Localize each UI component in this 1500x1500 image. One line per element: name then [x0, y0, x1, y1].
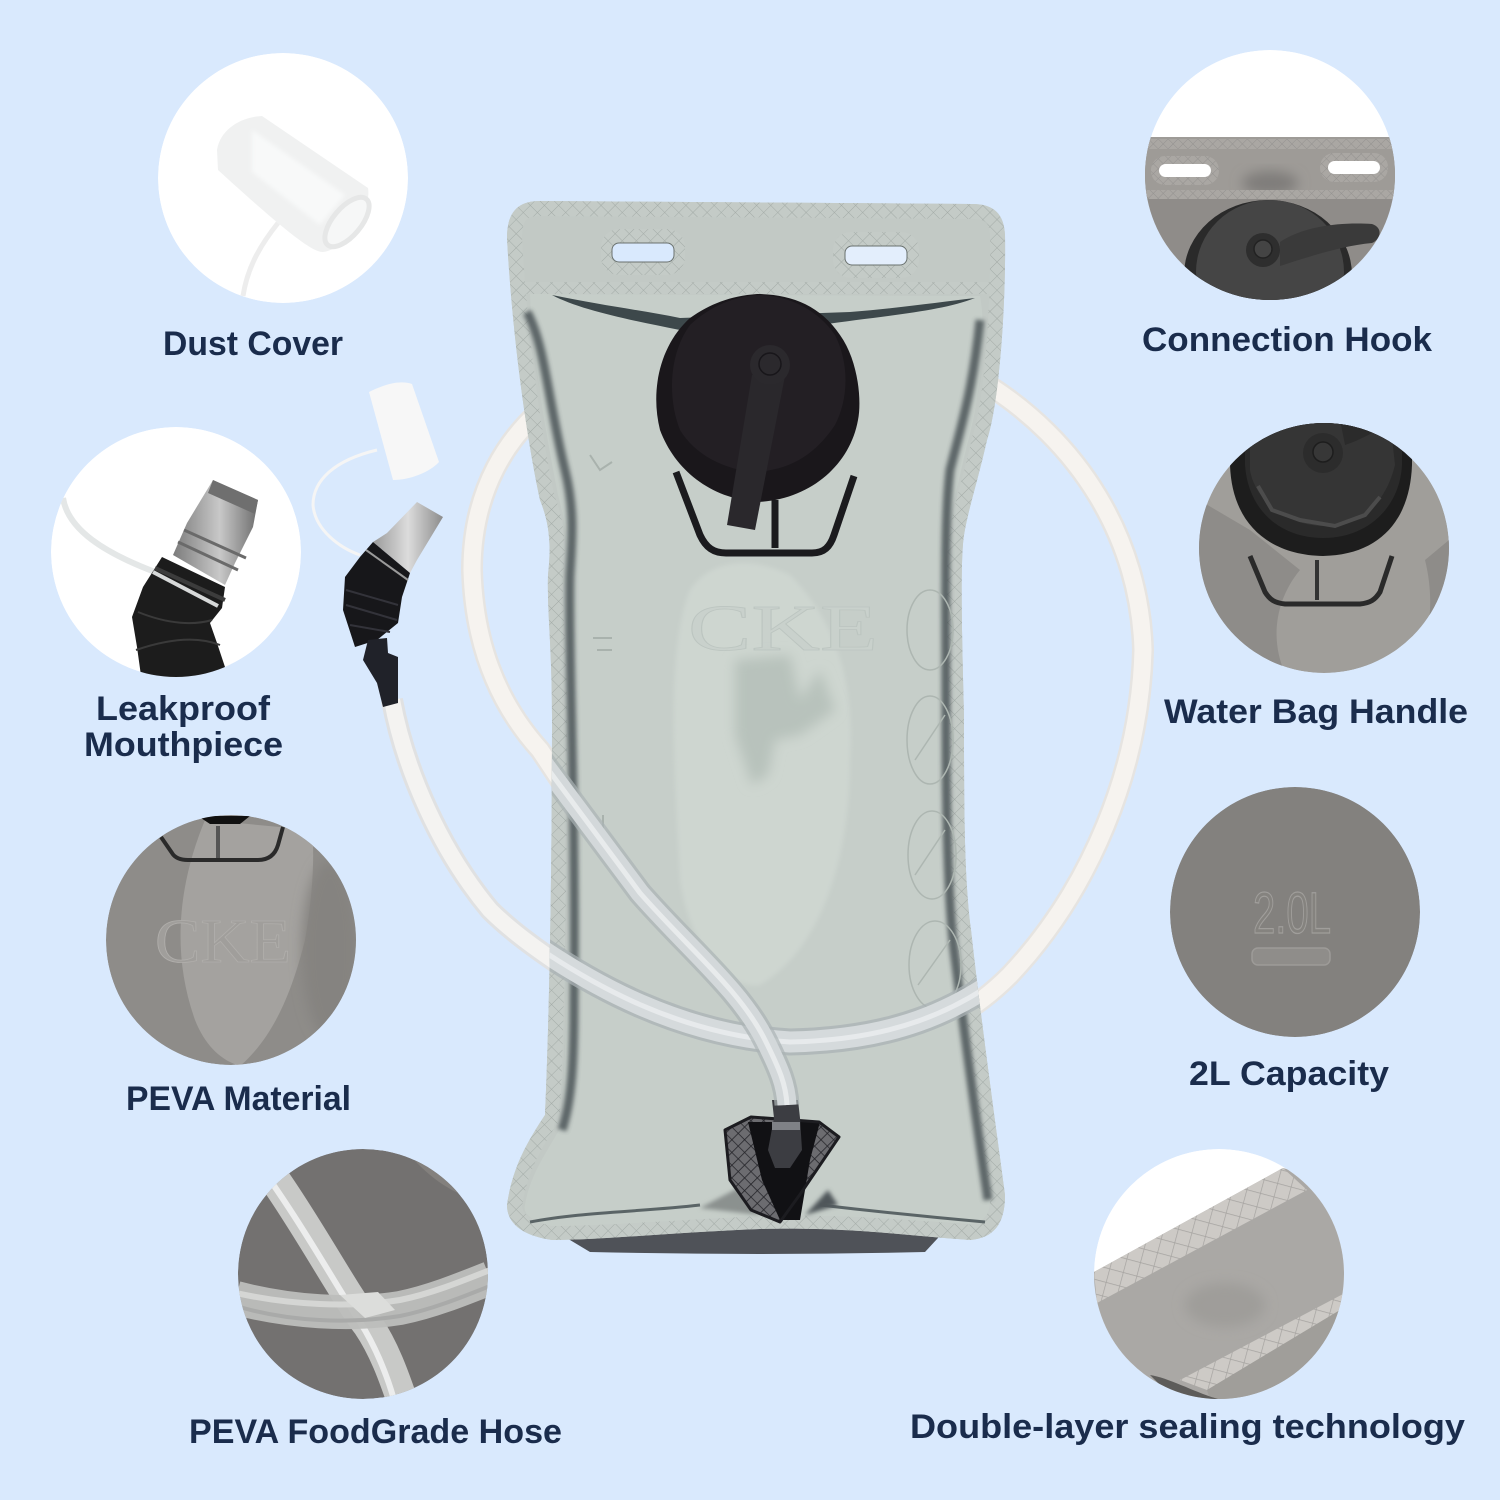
capacity marks	[590, 455, 612, 835]
icon: lighter centre oval	[181, 820, 313, 1066]
icon: clear valve tip	[173, 480, 258, 585]
left dark edge	[527, 312, 574, 1130]
upper header seam	[520, 282, 990, 294]
heading: Leakproof Mouthpiece: Leakproof	[96, 690, 271, 728]
bag shadow	[545, 1225, 950, 1254]
heading: PEVA Material: PEVA Material	[126, 1080, 351, 1118]
bottom dark crease	[530, 1205, 985, 1222]
icon: thin tether	[63, 498, 155, 572]
hanging slot right	[833, 232, 919, 278]
heading: PEVA FoodGrade Hose: PEVA FoodGrade Hose	[189, 1413, 562, 1451]
panel: connection hook detail	[1145, 50, 1395, 300]
icon: diagonal tube	[270, 1180, 402, 1400]
right dark edge	[946, 320, 988, 1200]
lanyard	[313, 450, 377, 555]
central lighter oval	[674, 563, 851, 985]
embossed fill line	[1252, 948, 1330, 965]
separate mouthpiece assembly	[313, 382, 443, 707]
hose loop behind the bag	[392, 380, 1143, 1018]
bag seam border	[507, 201, 1005, 1240]
main water bladder	[490, 190, 1030, 1250]
cap body	[656, 294, 859, 502]
top dark crease	[552, 295, 975, 330]
panel: PEVA material detail	[106, 815, 358, 1066]
warning icons right column	[907, 590, 961, 1009]
icon: handle frame	[161, 827, 283, 860]
embossed CKE logo: CKE	[688, 592, 878, 665]
cap assembly	[656, 294, 859, 553]
hose: run to outlet	[530, 745, 787, 1105]
heading: Double-layer sealing technology: Double-layer sealing technology	[910, 1408, 1465, 1446]
icon: handle frame	[1250, 556, 1392, 604]
panel: food grade hose detail	[236, 1149, 490, 1400]
icon: black elbow body	[132, 557, 225, 677]
heading: Water Bag Handle: Water Bag Handle	[1164, 693, 1468, 731]
icon: lanyard	[243, 223, 278, 296]
icon: right slot	[1320, 153, 1388, 182]
black elbow body	[343, 542, 410, 647]
panel: leakproof mouthpiece detail	[51, 427, 301, 690]
icon: cap with strap	[1184, 200, 1380, 300]
white dust cap	[369, 382, 439, 480]
barbed connector	[363, 638, 398, 707]
heading: Dust Cover: Dust Cover	[163, 325, 343, 363]
icon: clear dust cap	[217, 116, 377, 254]
icon: cap	[1230, 410, 1412, 556]
heading: Leakproof Mouthpiece	[84, 690, 283, 764]
hanging slot left	[601, 229, 685, 275]
outlet fitting	[700, 1100, 839, 1222]
icon: left slot	[1151, 156, 1219, 185]
hose: lower bend	[550, 940, 980, 1056]
icon: upper seam band	[1094, 1168, 1307, 1303]
front hose across the bag	[550, 754, 980, 1106]
embossed CKE logo: CKE	[155, 908, 291, 976]
bag interior	[525, 294, 990, 1226]
panel: double-layer sealing detail	[1094, 1149, 1344, 1399]
icon: lower seam band	[1180, 1293, 1345, 1390]
panel: 2L capacity detail	[1170, 787, 1420, 1037]
hose barb	[768, 1100, 802, 1168]
cap strap	[727, 375, 785, 530]
clear valve tip	[373, 502, 443, 573]
icon: horizontal tube	[236, 1270, 490, 1321]
heading: Leakproof Mouthpiece: Mouthpiece	[84, 726, 283, 764]
cap knob	[750, 345, 790, 385]
handle frame	[676, 472, 854, 553]
embossed 2.0L mark: 2.0L	[1253, 881, 1331, 946]
panel: dust cover detail	[158, 53, 408, 303]
reflection in bag	[735, 655, 835, 785]
heading: 2L Capacity: 2L Capacity	[1189, 1055, 1389, 1093]
panel: water bag handle detail	[1199, 410, 1449, 673]
heading: Connection Hook: Connection Hook	[1142, 321, 1432, 359]
